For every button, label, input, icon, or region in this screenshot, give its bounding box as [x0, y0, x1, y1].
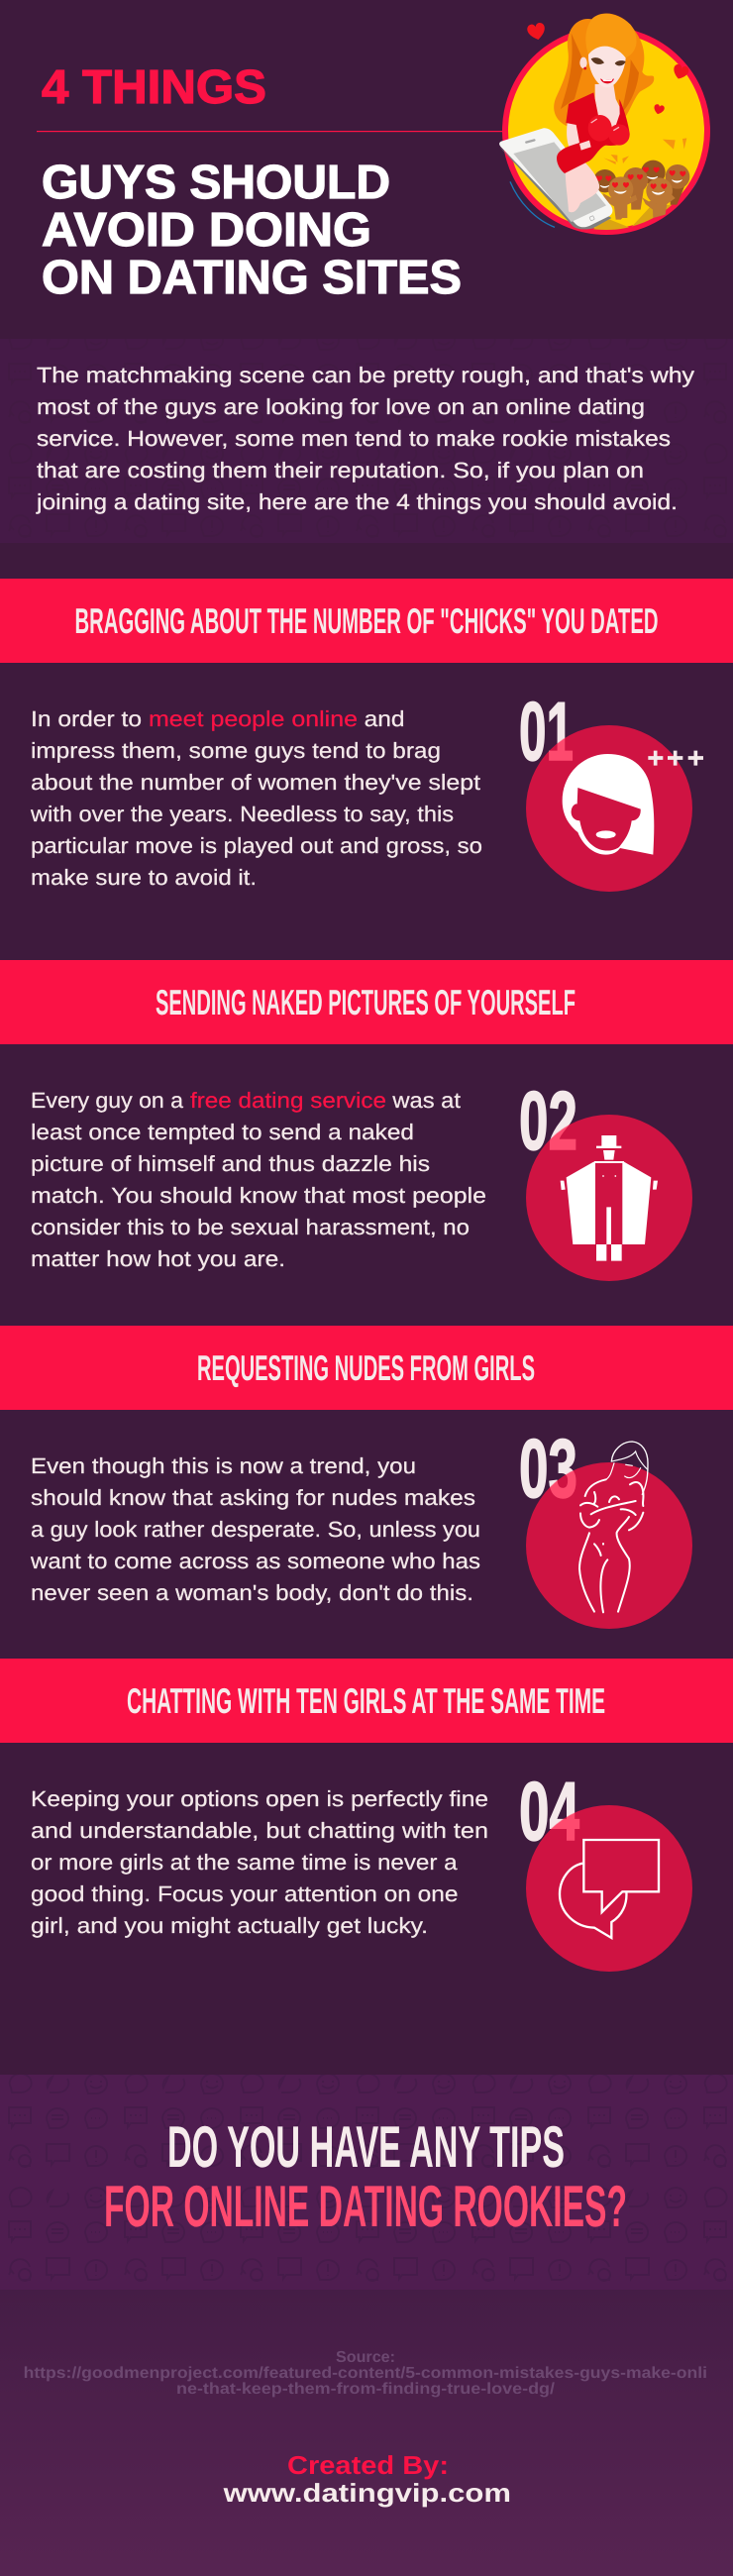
section 3 text: Even though this is now a trend, you [31, 1453, 416, 1478]
footer gradient [0, 2290, 733, 2576]
patterned band [0, 2075, 733, 2290]
face [588, 42, 626, 87]
section 1 text: In order to [31, 706, 142, 731]
fringe [585, 14, 637, 57]
section 2: sending naked pictures [0, 960, 733, 1281]
section 2 text: matter how hot you are. [31, 1246, 285, 1271]
section 2 text: least once tempted to send a naked [31, 1120, 414, 1144]
circle 4 [526, 1805, 692, 1972]
intro text: service. However, some men tend to make rookie mistakes [37, 426, 671, 451]
section 3 text: a guy look rather desperate. So, unless you [31, 1517, 480, 1542]
created by label: Created By: [287, 2450, 449, 2480]
heading: 4 things: 4 THINGS [42, 61, 266, 114]
section 2 banner [0, 960, 733, 1044]
section 4 text: Keeping your options open is perfectly fine [31, 1786, 488, 1811]
title block [37, 61, 503, 304]
hero illustration: woman on smartphone [499, 14, 707, 235]
heading: guys should avoid doing on dating sites [42, 157, 462, 304]
heading: guys should avoid doing on dating sites: ON DATING SITES [42, 252, 462, 304]
section 2 text: consider this to be sexual harassment, no [31, 1215, 470, 1239]
section 1 text [30, 706, 482, 890]
section 1 text: particular move is played out and gross, so [31, 833, 482, 858]
intro panel [0, 339, 733, 543]
neck and chest [595, 84, 622, 131]
intro text: The matchmaking scene can be pretty rough, and that's why [37, 363, 694, 387]
icon: man in open coat [561, 1135, 658, 1261]
icon: woman face [563, 751, 703, 855]
section 4 banner [0, 1659, 733, 1743]
intro text: joining a dating site, here are the 4 things you should avoid. [36, 489, 678, 514]
section 3 text: should know that asking for nudes makes [31, 1485, 475, 1510]
source note [24, 2349, 707, 2398]
heading rule [37, 131, 503, 132]
section 1: bragging [0, 579, 733, 892]
source note: Source: [336, 2349, 395, 2366]
floor [593, 204, 672, 230]
call to action panel [0, 2075, 733, 2290]
number 01: 01 [519, 685, 574, 778]
section 4 text: and understandable, but chatting with ten [31, 1818, 488, 1843]
section 3 banner [0, 1326, 733, 1410]
section 2 text [31, 1088, 486, 1271]
circle 3 [526, 1462, 692, 1629]
section 2 text: Every guy on a [31, 1088, 184, 1113]
footer panel [0, 2290, 733, 2576]
section 4 text: or more girls at the same time is never a [31, 1850, 458, 1875]
yellow disc with red ring [505, 30, 707, 232]
section 1 text: impress them, some guys tend to brag [31, 738, 441, 763]
blue arcs [510, 159, 703, 227]
icon: speech bubbles [560, 1840, 659, 1938]
section 2 text: match. You should know that most people [31, 1183, 486, 1208]
section 2 text: was at [391, 1088, 461, 1113]
intro text: most of the guys are looking for love on an online dating [37, 394, 645, 419]
intro text: that are costing them their reputation. So, if you plan on [37, 458, 644, 483]
section 1 text: with over the years. Needless to say, this [30, 802, 454, 826]
heading: guys should avoid doing on dating sites: GUYS SHOULD [42, 157, 390, 209]
circle 2 [526, 1115, 692, 1281]
section 4 text [31, 1786, 488, 1938]
hearts [526, 22, 547, 42]
section 3 text [30, 1453, 480, 1605]
section 4 text: good thing. Focus your attention on one [31, 1881, 458, 1906]
section 1 text: meet people online [149, 706, 358, 731]
heading: guys should avoid doing on dating sites: AVOID DOING [42, 204, 371, 257]
section 3 text: never seen a woman's body, don't do this. [31, 1580, 473, 1605]
section 1 text: make sure to avoid it. [31, 865, 257, 890]
section 1 banner [0, 579, 733, 663]
section 3: requesting nudes [0, 1326, 733, 1629]
section 2 text: free dating service [190, 1088, 386, 1113]
patterned band [0, 339, 733, 543]
icon: woman line drawing [579, 1442, 648, 1612]
number 04: 04 [519, 1765, 579, 1858]
circle 1 [526, 725, 692, 892]
website address: www.datingvip.com [222, 2478, 511, 2508]
number 02: 02 [519, 1074, 577, 1167]
section 4 text: girl, and you might actually get lucky. [31, 1913, 428, 1938]
section 1 text: about the number of women they've slept [31, 770, 480, 795]
smartphone [499, 128, 612, 229]
dress [557, 92, 630, 173]
legs [566, 161, 599, 212]
section 2 text: picture of himself and thus dazzle his [31, 1151, 430, 1176]
woman [554, 14, 654, 212]
orange sparks [603, 138, 686, 164]
admirers crowd [593, 161, 689, 220]
section 3 text: want to come across as someone who has [30, 1549, 480, 1573]
arm [567, 123, 581, 149]
intro text [36, 363, 694, 514]
source note: ne-that-keep-them-from-finding-true-love-dg/ [176, 2381, 556, 2398]
section 4: chatting with ten girls [0, 1659, 733, 1972]
number 03: 03 [519, 1422, 577, 1515]
section 1 text: and [365, 706, 405, 731]
source note: https://goodmenproject.com/featured-content/5-common-mistakes-guys-make-onli [24, 2365, 707, 2382]
